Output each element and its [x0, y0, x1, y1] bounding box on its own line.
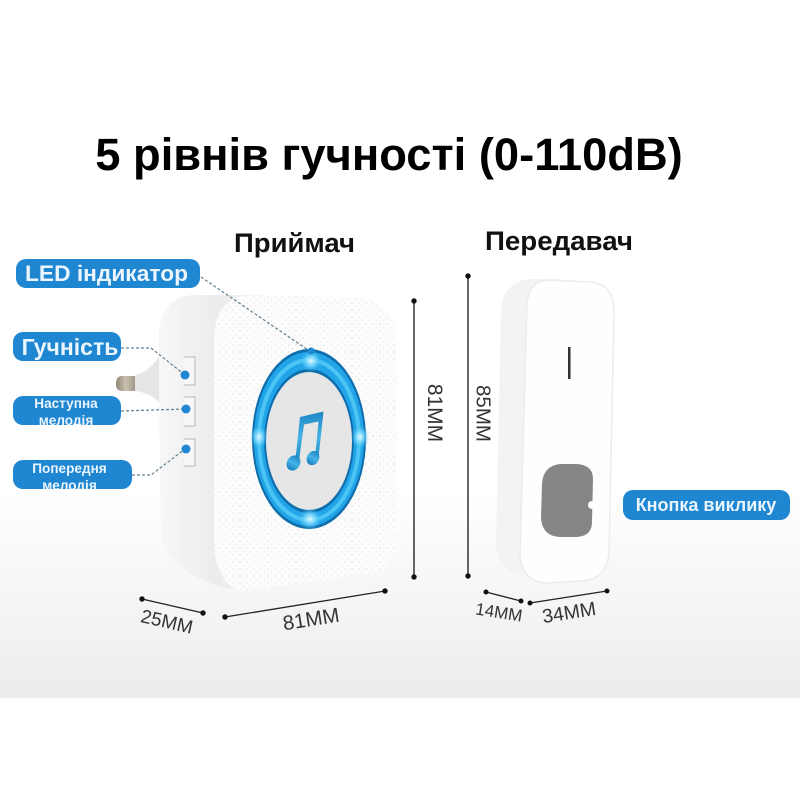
callout: LED indicator: LED індикатор	[25, 261, 188, 286]
previous button	[184, 439, 195, 466]
button light	[588, 501, 596, 509]
dimension: receiver depth	[139, 596, 206, 639]
receiver device	[116, 295, 397, 592]
callout: previous melody	[13, 460, 132, 489]
speaker dot texture	[214, 295, 397, 592]
callout dots	[180, 348, 314, 454]
callout: previous melody: Попередня	[32, 461, 107, 476]
volume button	[184, 357, 195, 385]
dimension: receiver width: 81MM	[281, 604, 341, 635]
transmitter side	[496, 279, 560, 583]
ring light band	[254, 352, 364, 526]
callout: next melody: мелодія	[39, 413, 93, 428]
receiver side housing	[159, 295, 262, 591]
plug base	[135, 352, 166, 408]
ring glow top	[300, 350, 322, 372]
heading: receiver: Приймач	[234, 228, 355, 258]
ring highlight	[259, 360, 359, 520]
ring dark edge	[252, 349, 366, 529]
icon: music note	[284, 412, 324, 473]
dimension: receiver width	[222, 588, 388, 635]
title: 5 рівнів гучності (0-110dB)	[95, 129, 683, 180]
callout: previous melody: мелодія	[42, 478, 97, 493]
dimension: receiver depth: 25MM	[139, 606, 195, 639]
dimension: transmitter width	[528, 588, 610, 628]
callout: call button	[623, 490, 790, 520]
ring glow right	[351, 425, 369, 449]
dimension: receiver height	[411, 298, 446, 580]
dimension: transmitter width: 34MM	[541, 598, 598, 628]
ring glow left	[250, 425, 268, 449]
LED ring	[250, 349, 369, 530]
dimension: transmitter height	[465, 273, 494, 579]
dimension: transmitter depth: 14MM	[474, 599, 524, 626]
callout: next melody	[13, 396, 121, 428]
ring inner face	[265, 371, 353, 511]
callout lines	[121, 277, 311, 475]
transmitter device	[496, 279, 614, 583]
ring glow bottom	[298, 508, 322, 530]
call button	[541, 464, 593, 537]
callout: volume: Гучність	[22, 334, 118, 360]
transmitter indicator slit	[568, 347, 570, 379]
transmitter front	[520, 280, 614, 583]
next button	[184, 397, 195, 426]
callout: next melody: Наступна	[34, 396, 98, 411]
dimension: transmitter height: 85MM	[472, 385, 494, 442]
heading: transmitter: Передавач	[485, 226, 633, 256]
callout: call button: Кнопка виклику	[636, 495, 776, 515]
dimension: receiver height: 81MM	[423, 384, 446, 442]
receiver front face	[214, 295, 397, 592]
plug pin	[116, 376, 140, 391]
